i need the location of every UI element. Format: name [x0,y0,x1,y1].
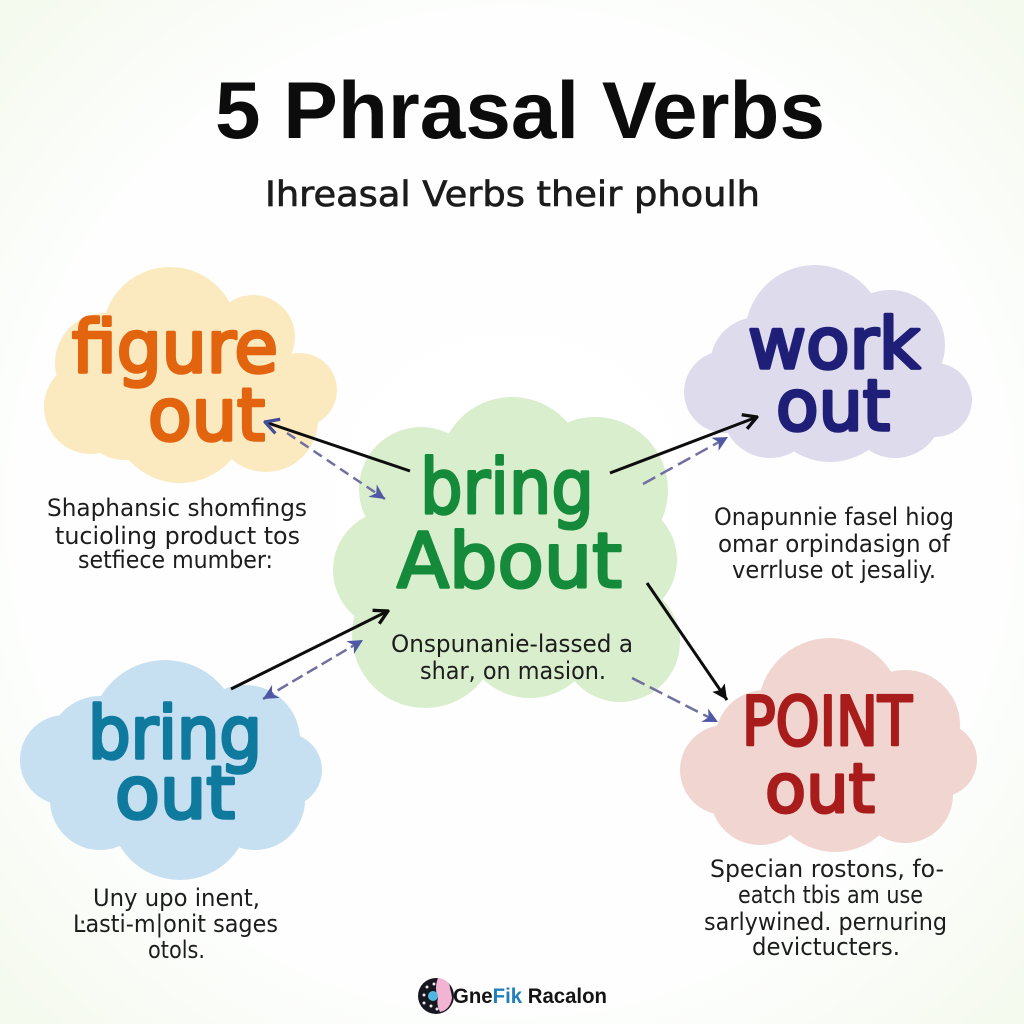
heading: figure out: out [148,373,265,457]
arrows: bring about and work out [610,417,757,484]
text: figure out description: setfiece mumber: [78,546,273,574]
text: bring out description: Ŀasti-m|onit sages [73,910,278,938]
text: work out description: omar orpindasign of [718,530,951,558]
text: point out description: Specian rostons, fo- [710,855,944,883]
heading: work out: work [748,303,920,385]
heading: bring about [397,442,622,605]
heading: figure out: figure [72,305,278,389]
heading: work out: out [776,365,890,447]
text: bring out description: Uny upo inent, [93,884,260,912]
heading: bring about: bring [420,442,594,531]
cloud: figure out [44,267,337,483]
subtitle: Ihreasal Verbs their phoulh [265,175,760,215]
title: 5 Phrasal Verbs [215,66,825,156]
text: work out description: verrluse ot jesaliy. [732,556,936,584]
heading: bring out [88,691,262,835]
cloud: point out [680,638,977,852]
heading: point out: out [765,750,875,829]
text: bring about description: shar, on masion. [420,657,606,685]
text: point out description [704,855,947,961]
icon: logo globe [418,978,454,1014]
heading: figure out [72,305,278,457]
arrows: bring out and bring about [231,611,388,699]
logo [418,978,607,1014]
text: figure out description: tuciolіng product tos [55,522,300,550]
logo wordmark: GneFik Racalon [453,985,607,1008]
heading: bring about: About [397,516,622,605]
heading: point out [742,683,912,829]
text: point out description: eatch tbis am use [738,881,923,909]
heading: bring out: bring [88,691,262,775]
text: bring about description: Onspunanie-lassed a [391,630,633,658]
cloud: work out [684,265,972,462]
heading: bring out: out [115,751,235,835]
text: point out description: devictucters. [752,933,900,961]
text: point out description: sarlywined. pernuring [704,908,947,936]
text: work out description [714,503,954,584]
text: bring out description [73,884,278,964]
text: figure out description: Shaphansic shomfings [47,494,307,522]
text: work out description: Onapunnie fasel hiog [714,503,954,531]
arrows: bring about and point out [632,583,727,722]
cloud: bring out [20,660,322,880]
cloud: bring about [333,397,680,708]
text: figure out description [47,494,307,574]
arrows: figure out and bring about [265,422,410,499]
heading: point out: POINT [742,683,912,762]
text: bring out description: otols. [148,936,205,964]
text: bring about description [391,630,633,685]
heading: work out [748,303,920,447]
